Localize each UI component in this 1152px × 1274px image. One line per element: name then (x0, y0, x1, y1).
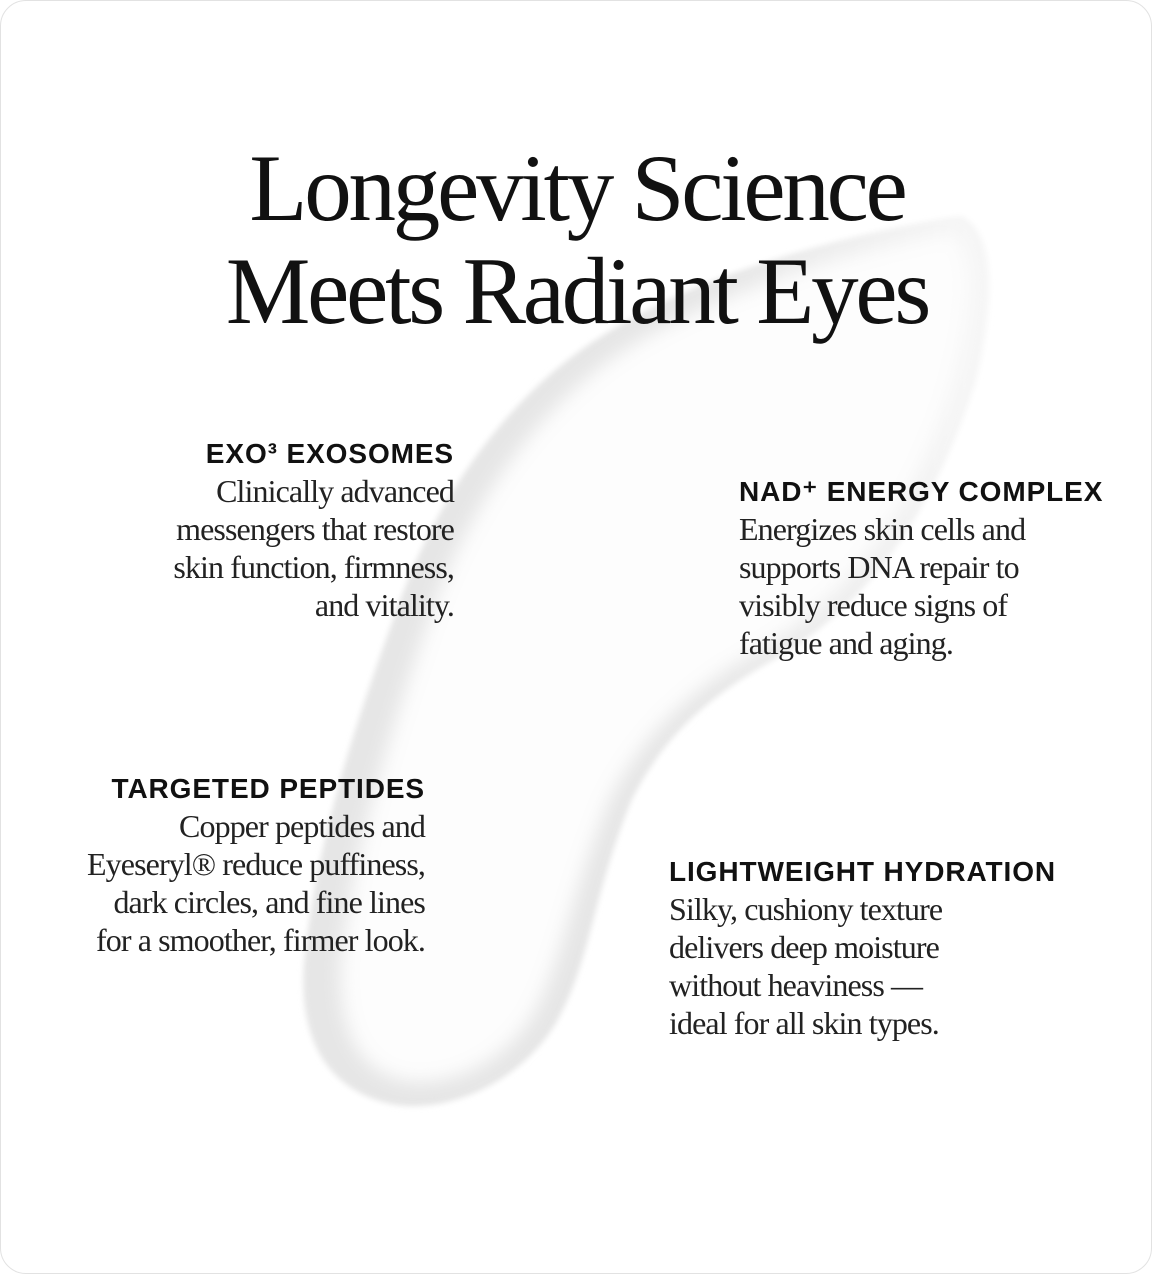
heading: peptides: TARGETED PEPTIDES (112, 773, 425, 804)
block: NAD (739, 476, 1103, 661)
heading: hydration: LIGHTWEIGHT HYDRATION (669, 856, 1056, 887)
text: exosomes: skin function, firmness, (173, 549, 454, 585)
title: Meets Radiant Eyes (226, 238, 928, 344)
text: exosomes: messengers that restore (176, 511, 454, 547)
text: NAD: fatigue and aging. (739, 625, 953, 661)
text: NAD: Energizes skin cells and (739, 511, 1025, 547)
text: NAD: visibly reduce signs of (739, 587, 1007, 623)
block: peptides (87, 773, 426, 958)
text: exosomes: Clinically advanced (216, 473, 454, 509)
title: Longevity Science (249, 135, 905, 241)
block: hydration (669, 856, 1056, 1041)
text: exosomes (173, 473, 454, 623)
text: hydration: ideal for all skin types. (669, 1005, 939, 1041)
block: exosomes (173, 438, 454, 623)
text: NAD: supports DNA repair to (739, 549, 1019, 585)
text: exosomes: and vitality. (315, 587, 454, 623)
text: peptides: for a smoother, firmer look. (96, 922, 425, 958)
heading: NAD: NAD⁺ ENERGY COMPLEX (739, 476, 1103, 507)
text: NAD (739, 511, 1026, 661)
text: hydration: Silky, cushiony texture (669, 891, 942, 927)
text: peptides: Copper peptides and (179, 808, 425, 844)
heading: exosomes: EXO³ EXOSOMES (206, 438, 454, 469)
text: hydration (669, 891, 942, 1041)
title (226, 135, 928, 344)
text: peptides (87, 808, 426, 958)
text: hydration: delivers deep moisture (669, 929, 939, 965)
text: peptides: Eyeseryl® reduce puffiness, (87, 846, 425, 882)
text: hydration: without heaviness — (669, 967, 922, 1003)
text: peptides: dark circles, and fine lines (113, 884, 425, 920)
